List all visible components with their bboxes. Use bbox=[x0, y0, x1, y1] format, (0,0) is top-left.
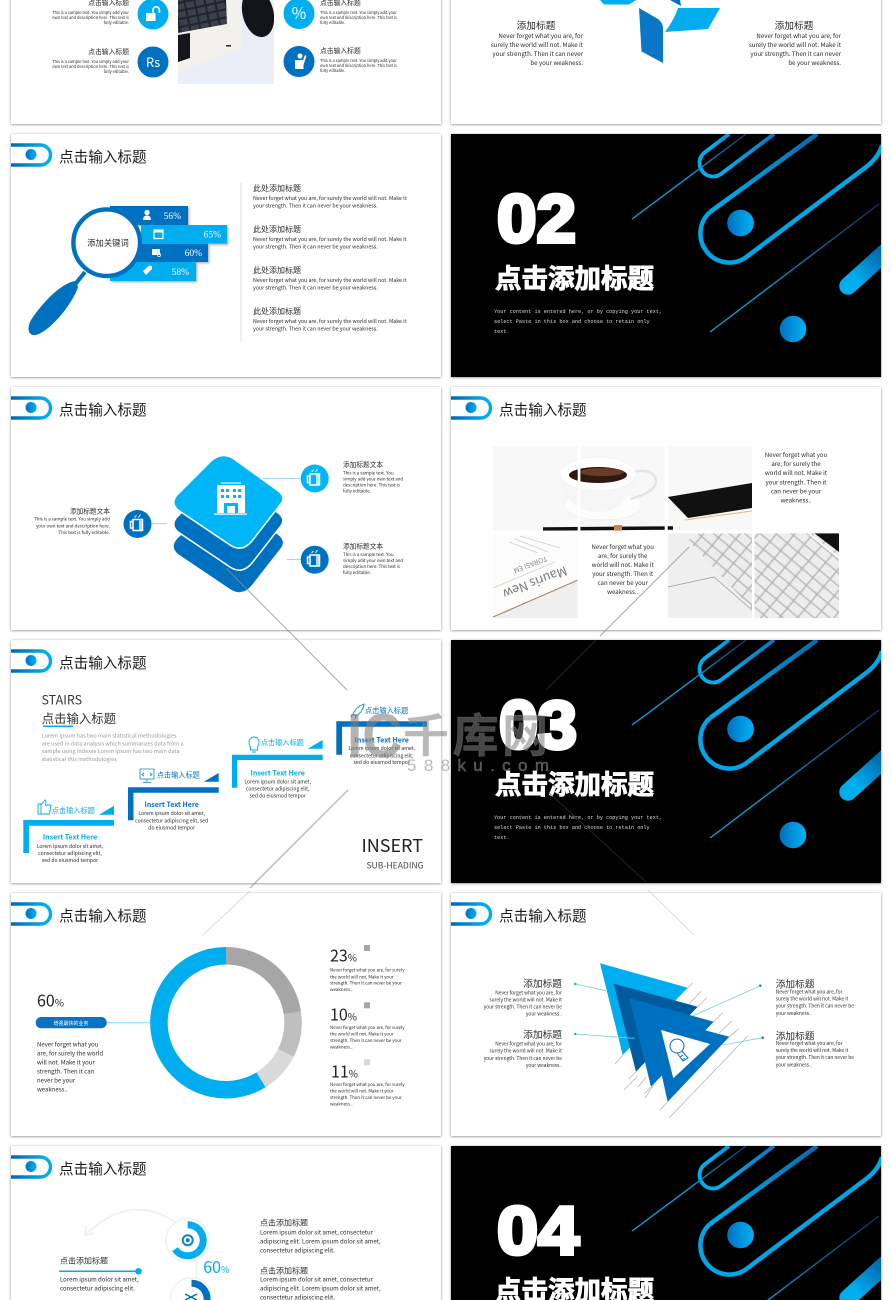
text: left item bbox=[59, 1256, 142, 1292]
panel: stacked layers bbox=[11, 387, 441, 630]
header bbox=[451, 904, 587, 926]
text block: right: surely the world will not. Make it bbox=[749, 40, 842, 49]
icon circle: left bbox=[124, 510, 152, 538]
text: left lower: surely the world will not. Make it bbox=[489, 1048, 562, 1055]
phone bbox=[667, 483, 752, 525]
panel: top-left icons with laptop photo bbox=[11, 0, 441, 124]
section title: 点击添加标题 bbox=[495, 257, 654, 296]
panel: top-right pinwheel bbox=[451, 0, 881, 124]
stat: 10% bbox=[330, 1002, 405, 1050]
percentage bars: 60% bbox=[185, 249, 202, 259]
stat: 11%: 11% bbox=[331, 1059, 358, 1083]
text: right bottom: 添加标题文本 bbox=[343, 541, 383, 551]
text block: left bbox=[491, 18, 584, 67]
text block: right: 添加标题 bbox=[775, 18, 814, 32]
header: 点击输入标题 bbox=[59, 146, 147, 167]
text block: top-left items: fully editable. bbox=[320, 68, 345, 74]
text block: top-left items: 点击输入标题 bbox=[88, 46, 129, 56]
panel: donut chart bbox=[11, 893, 441, 1136]
stat: 23%: weakness.. bbox=[330, 986, 353, 993]
laptop photo bbox=[178, 0, 279, 84]
value 60%: 60% bbox=[203, 1254, 229, 1278]
text block: left: 添加标题 bbox=[517, 18, 556, 32]
icon circle: right bottom bbox=[301, 546, 329, 574]
intro text: sample using indexes Lorem Ipsum has two main data bbox=[42, 747, 180, 755]
insert sub-heading: SUB-HEADING bbox=[366, 859, 424, 871]
stair 4: sed do eiusmod tempor bbox=[354, 759, 410, 766]
stat: 10%: the world will not. Make it your bbox=[330, 1031, 394, 1038]
percentage bars: 56% bbox=[164, 212, 181, 222]
section description: text. bbox=[494, 329, 510, 335]
icon: thumb up bbox=[38, 800, 51, 814]
intro text: are used in data analysis which summarizes data from a bbox=[42, 739, 184, 747]
stair 1: sed do eiusmod tempor bbox=[42, 857, 98, 864]
section description: Your content is entered here, or by copying your text, bbox=[494, 309, 662, 315]
text block: top-left items: own text and description here. This text is bbox=[52, 15, 129, 21]
icon: rocket bbox=[351, 704, 364, 719]
text block: four items: 此处添加标题 bbox=[253, 306, 301, 317]
watermark diagonal lines bbox=[226, 547, 689, 888]
callout: 60%: 60% bbox=[37, 988, 64, 1012]
stair 1: consectetur adipiscing elit, bbox=[38, 850, 102, 857]
header: 点击输入标题 bbox=[59, 399, 147, 420]
panel: section 03 bbox=[451, 640, 890, 883]
connector lines bbox=[575, 984, 763, 1045]
text block: left: Never forget what you are, for bbox=[498, 31, 584, 40]
panel: section 02 bbox=[451, 134, 890, 377]
text cell: center: your strength. Then it bbox=[592, 569, 654, 578]
text block: four items: your strength. Then it can never be your weakness. bbox=[253, 202, 378, 210]
stat: 11%: strength. Then it can never be your bbox=[330, 1094, 402, 1101]
percentage bars bbox=[110, 206, 227, 281]
section title: 点击添加标题 bbox=[495, 763, 654, 802]
text: right items: Lorem ipsum dolor sit amet, consectetur bbox=[260, 1227, 374, 1236]
stair 4: Insert Text Here bbox=[355, 736, 409, 746]
text: right lower: 添加标题 bbox=[776, 1028, 815, 1042]
stair 1: Insert Text Here bbox=[43, 832, 97, 842]
stair 3: consectetur adipiscing elit, bbox=[246, 786, 310, 793]
icon circle: right top bbox=[301, 464, 329, 492]
panel: magnifier keywords bbox=[11, 134, 441, 377]
stat: 10%: 10% bbox=[330, 1002, 357, 1026]
magnifier bbox=[29, 209, 140, 335]
section number: 02 bbox=[497, 181, 576, 257]
text cell: right: are, for surely the bbox=[771, 459, 821, 468]
text block: four items: Never forget what you are, for surely the world will not. Make it bbox=[253, 317, 407, 325]
text: right top: fully editable. bbox=[343, 487, 371, 494]
section description: Your content is entered here, or by copying your text, bbox=[494, 815, 662, 821]
text block: four items: Never forget what you are, for surely the world will not. Make it bbox=[253, 235, 407, 243]
text: left lower: your strength. Then it can never be bbox=[484, 1055, 562, 1062]
text block: four items: 此处添加标题 bbox=[253, 265, 301, 276]
percentage bars: 65% bbox=[204, 230, 221, 240]
header: 点击输入标题 bbox=[59, 1158, 147, 1179]
text cell: right: weakness.. bbox=[780, 495, 812, 504]
text cell: right: world will not. Make it bbox=[765, 468, 828, 477]
text: left: This text is fully editable. bbox=[58, 529, 110, 536]
header bbox=[11, 145, 147, 167]
text block: four items bbox=[253, 183, 407, 332]
panel: stairs bbox=[11, 640, 441, 883]
text: right bottom: simply add your own text and bbox=[343, 557, 403, 564]
icon: lock bbox=[138, 0, 168, 30]
text cell: center: world will not. Make it bbox=[592, 560, 655, 569]
icon: light bulb bbox=[670, 1039, 688, 1061]
faint watermark lines bbox=[203, 890, 694, 935]
coffee cup bbox=[564, 494, 642, 520]
stat: 11%: weakness.. bbox=[330, 1100, 353, 1107]
callout: 60%: Never forget what you bbox=[37, 1039, 99, 1048]
stat: 10%: Never forget what you are, for surely bbox=[330, 1024, 405, 1031]
stat: 10%: weakness.. bbox=[330, 1043, 353, 1050]
watermark text: IC bbox=[347, 702, 402, 771]
text block: top-left items: own text and description here. This text is bbox=[52, 64, 129, 70]
header bbox=[11, 398, 147, 420]
panel: section 04 bbox=[451, 1146, 890, 1300]
text block: top-left items: own text and description here. This text is bbox=[320, 63, 397, 69]
text: right top: simply add your own text and bbox=[343, 476, 403, 483]
header bbox=[451, 398, 587, 420]
text block: top-left items: fully editable. bbox=[104, 69, 129, 75]
text block: top-left items bbox=[52, 0, 397, 75]
text block: four items: Never forget what you are, for surely the world will not. Make it bbox=[253, 276, 407, 284]
intro text bbox=[42, 690, 184, 763]
text: left upper: Never forget what you are, for bbox=[495, 989, 562, 996]
text: left upper: your weakness.. bbox=[526, 1011, 562, 1018]
stat: 23%: Never forget what you are, for surely bbox=[330, 967, 405, 974]
text: right lower: your strength. Then it can never be bbox=[776, 1054, 854, 1061]
text: right items: adipiscing elit. Lorem ipsum dolor sit amet, bbox=[260, 1284, 381, 1293]
text block: four items: 此处添加标题 bbox=[253, 183, 301, 194]
stair 3: 点击输入标题 bbox=[261, 738, 304, 748]
text: left lower: Never forget what you are, for bbox=[495, 1041, 562, 1048]
intro text: 点击输入标题 bbox=[42, 709, 116, 727]
text block: top-left items: fully editable. bbox=[104, 20, 129, 26]
text: right bottom: description here. This text is bbox=[343, 563, 400, 570]
text: left upper: surely the world will not. Make it bbox=[489, 996, 562, 1003]
layered diamonds bbox=[174, 455, 283, 592]
icon: percent bbox=[284, 0, 314, 29]
text: right upper: 添加标题 bbox=[776, 976, 815, 990]
stair 2: Lorem ipsum dolor sit amet, bbox=[138, 810, 206, 817]
text block: four items: your strength. Then it can never be your weakness. bbox=[253, 324, 378, 332]
stat: 23%: strength. Then it can never be your bbox=[330, 980, 402, 987]
callout: 60%: strength. Then it can bbox=[37, 1066, 95, 1075]
icon: person at desk bbox=[284, 46, 314, 77]
text block: four items: your strength. Then it can never be your weakness. bbox=[253, 242, 378, 250]
text: left upper: 添加标题 bbox=[523, 976, 562, 990]
stat: 11% bbox=[330, 1059, 405, 1107]
stair 2: do eiusmod tempor bbox=[148, 824, 195, 831]
text cell: center: Never forget what you bbox=[591, 542, 654, 551]
decorative blue shapes bbox=[632, 640, 890, 848]
text block: top-left items: 点击输入标题 bbox=[320, 45, 361, 55]
stair 1: 点击输入标题 bbox=[52, 806, 95, 816]
text: left upper: your strength. Then it can never be bbox=[484, 1003, 562, 1010]
stat: 23%: the world will not. Make it your bbox=[330, 973, 394, 980]
panel: circular progress bbox=[11, 1146, 441, 1300]
icon: building bbox=[214, 482, 247, 515]
stair 1: Lorem ipsum dolor sit amet, bbox=[37, 843, 104, 850]
section number: 04 bbox=[497, 1193, 579, 1269]
callout: 60%: weakness.. bbox=[37, 1085, 68, 1094]
header bbox=[11, 904, 147, 926]
donut bbox=[159, 956, 293, 1090]
text block: top-left items: own text and description here. This text is bbox=[320, 15, 397, 21]
callout: 60%: will not. Make it your bbox=[37, 1057, 95, 1066]
text: right upper: surely the world will not. Make it bbox=[776, 996, 849, 1003]
text: left: This is a sample text. You simply add bbox=[34, 516, 110, 523]
watermark lines on dark panel bbox=[546, 640, 646, 882]
section description: text. bbox=[494, 835, 510, 841]
divider bbox=[240, 183, 242, 341]
progress ring 2 bbox=[170, 1278, 212, 1300]
header: 点击输入标题 bbox=[59, 652, 147, 673]
text: right lower: Never forget what you are, for bbox=[776, 1040, 843, 1047]
section description: select Paste in this box and choose to retain only bbox=[494, 319, 650, 325]
text block: left: your strength. Then it can never bbox=[492, 49, 584, 58]
stat: 11%: Never forget what you are, for surely bbox=[330, 1081, 405, 1088]
text: right upper: your weakness.. bbox=[776, 1010, 812, 1017]
stair 3: sed do eiusmod tempor bbox=[250, 793, 306, 800]
stair 3: Insert Text Here bbox=[251, 768, 305, 778]
text cell: right: Never forget what you bbox=[765, 450, 828, 459]
connector dots bbox=[574, 983, 764, 1040]
text cell: center: can never be your bbox=[598, 578, 649, 587]
photo collage: Mauris New bbox=[500, 562, 570, 604]
newspaper bbox=[493, 581, 578, 618]
text: left bbox=[34, 506, 110, 536]
text block: right: be your weakness. bbox=[788, 58, 841, 67]
connectors bbox=[152, 478, 301, 560]
progress ring 1 bbox=[166, 1219, 209, 1280]
text block: four items: 此处添加标题 bbox=[253, 224, 301, 235]
text: left: 添加标题文本 bbox=[70, 506, 110, 516]
text block: top-left items: This is a sample text. You simply add your bbox=[52, 59, 129, 65]
text cell: right: your strength. Then it bbox=[766, 477, 827, 486]
text block: four items: Never forget what you are, for surely the world will not. Make it bbox=[253, 194, 407, 202]
panel: triangles bbox=[451, 893, 881, 1136]
text: left item: Lorem ipsum dolor sit amet, bbox=[60, 1274, 139, 1283]
text: right items: 点击添加标题 bbox=[260, 1217, 308, 1228]
text block: top-left items: This is a sample text. You simply add your bbox=[320, 58, 397, 64]
watermark text bbox=[347, 700, 552, 775]
text: right top: description here. This text is bbox=[343, 482, 400, 489]
text: right bottom bbox=[343, 541, 403, 576]
intro text: STAIRS bbox=[42, 690, 82, 709]
callout: 60%: 增强最快的业务 bbox=[53, 1020, 89, 1027]
text: left lower bbox=[484, 1027, 562, 1069]
text: right lower: your weakness.. bbox=[776, 1061, 812, 1068]
text: right items: Lorem ipsum dolor sit amet, consectetur bbox=[260, 1275, 374, 1284]
intro text: Lorem Ipsum has two main statistical methodologies bbox=[42, 731, 177, 739]
text: right items: adipiscing elit. Lorem ipsum dolor sit amet, bbox=[260, 1236, 381, 1245]
text: left item: 点击添加标题 bbox=[60, 1256, 108, 1267]
stat: 10%: strength. Then it can never be your bbox=[330, 1037, 402, 1044]
text: right top: This is a sample text. You bbox=[343, 470, 394, 477]
section number: 03 bbox=[499, 687, 577, 763]
section description: select Paste in this box and choose to retain only bbox=[494, 825, 650, 831]
pinwheel graphic bbox=[600, 0, 720, 63]
photo collage: TORASI EM bbox=[512, 553, 549, 575]
panel: photo grid bbox=[451, 387, 881, 630]
text block: right bbox=[749, 18, 842, 67]
text: left lower: your weakness.. bbox=[526, 1062, 562, 1069]
stair 3: Lorem ipsum dolor sit amet, bbox=[244, 778, 312, 785]
callout: 60%: never be your bbox=[37, 1076, 76, 1085]
pen bbox=[543, 528, 673, 529]
text block: top-left items: This is a sample text. You simply add your bbox=[52, 10, 129, 16]
insert sub-heading: INSERT bbox=[361, 832, 423, 858]
nested triangles bbox=[600, 963, 729, 1102]
icon: monitor bbox=[140, 769, 154, 782]
decorative blue shapes bbox=[632, 1146, 890, 1300]
text block: right: your strength. Then it can never bbox=[750, 49, 842, 58]
text block: top-left items: This is a sample text. You simply add your bbox=[320, 10, 397, 16]
stat: 23% bbox=[330, 943, 405, 993]
text: left lower: 添加标题 bbox=[523, 1027, 562, 1041]
stair 1 bbox=[23, 800, 114, 864]
text: right upper: Never forget what you are, for bbox=[776, 989, 843, 996]
hatch lines bbox=[615, 983, 748, 1118]
text: right items: consectetur adipiscing elit. bbox=[260, 1245, 335, 1254]
photo collage bbox=[493, 446, 840, 618]
text: right lower: surely the world will not. Make it bbox=[776, 1047, 849, 1054]
text block: top-left items: fully editable. bbox=[320, 20, 345, 26]
stair 3 bbox=[232, 737, 323, 800]
header: 点击输入标题 bbox=[59, 905, 147, 926]
text block: right: Never forget what you are, for bbox=[756, 31, 842, 40]
icon: percent: % bbox=[292, 0, 307, 24]
text block: four items: your strength. Then it can never be your weakness. bbox=[253, 284, 378, 292]
stat: 23%: 23% bbox=[330, 943, 357, 967]
header: 点击输入标题 bbox=[499, 399, 587, 420]
icon: rupee bbox=[138, 46, 168, 78]
stair 4 bbox=[336, 704, 427, 766]
text: right lower bbox=[776, 1028, 854, 1068]
stair 4: Lorem ipsum dolor sit amet, bbox=[348, 745, 416, 752]
text cell: right: can never be your bbox=[771, 486, 822, 495]
text: right bottom: This is a sample text. You bbox=[343, 551, 394, 558]
text: left upper bbox=[484, 976, 562, 1018]
stair 2 bbox=[128, 769, 219, 831]
callout: 60% bbox=[36, 988, 150, 1094]
text: right bottom: fully editable. bbox=[343, 569, 371, 576]
text: right top bbox=[343, 459, 403, 494]
keyboard bbox=[668, 533, 840, 618]
watermark text: 588ku.com bbox=[407, 756, 549, 775]
watermark text: 千库网 bbox=[403, 700, 552, 766]
text: right upper: your strength. Then it can never be bbox=[776, 1003, 854, 1010]
stair 4: 点击输入标题 bbox=[365, 706, 408, 716]
insert sub-heading bbox=[361, 832, 424, 871]
text block: left: be your weakness. bbox=[530, 58, 583, 67]
text: right items: 点击添加标题 bbox=[260, 1265, 308, 1276]
text: left: your own text and description here. bbox=[36, 522, 110, 529]
text: right upper bbox=[776, 976, 854, 1017]
decorative blue shapes bbox=[632, 134, 890, 342]
percentage bars: 58% bbox=[172, 268, 189, 278]
stat: 11%: the world will not. Make it your bbox=[330, 1088, 394, 1095]
stair 2: 点击输入标题 bbox=[157, 770, 200, 780]
header bbox=[11, 651, 147, 673]
stair 2: Insert Text Here bbox=[145, 800, 199, 810]
icon: bulb bbox=[249, 737, 259, 752]
header bbox=[11, 1157, 147, 1179]
text: left item: consectetur adipiscing elit. bbox=[60, 1283, 135, 1292]
stair 2: consectetur adipiscing elit, sed bbox=[135, 817, 208, 824]
magnifier: 添加关键词 bbox=[87, 237, 129, 249]
text: right top: 添加标题文本 bbox=[343, 459, 383, 469]
text cell: center: weakness.. bbox=[607, 587, 639, 596]
icon: rupee: Rs bbox=[146, 52, 160, 71]
callout: 60%: are, for surely the world bbox=[37, 1048, 103, 1057]
intro text: statistical this methodologies bbox=[42, 755, 117, 763]
curved arrow bbox=[85, 1210, 175, 1235]
text cell: center: are, for surely the bbox=[598, 551, 648, 560]
grid gaps and text cells bbox=[493, 446, 840, 619]
stair 4: consectetur adipiscing elit, bbox=[350, 752, 414, 759]
text: right items bbox=[260, 1217, 381, 1300]
header: 点击输入标题 bbox=[499, 905, 587, 926]
text block: left: surely the world will not. Make it bbox=[491, 40, 584, 49]
